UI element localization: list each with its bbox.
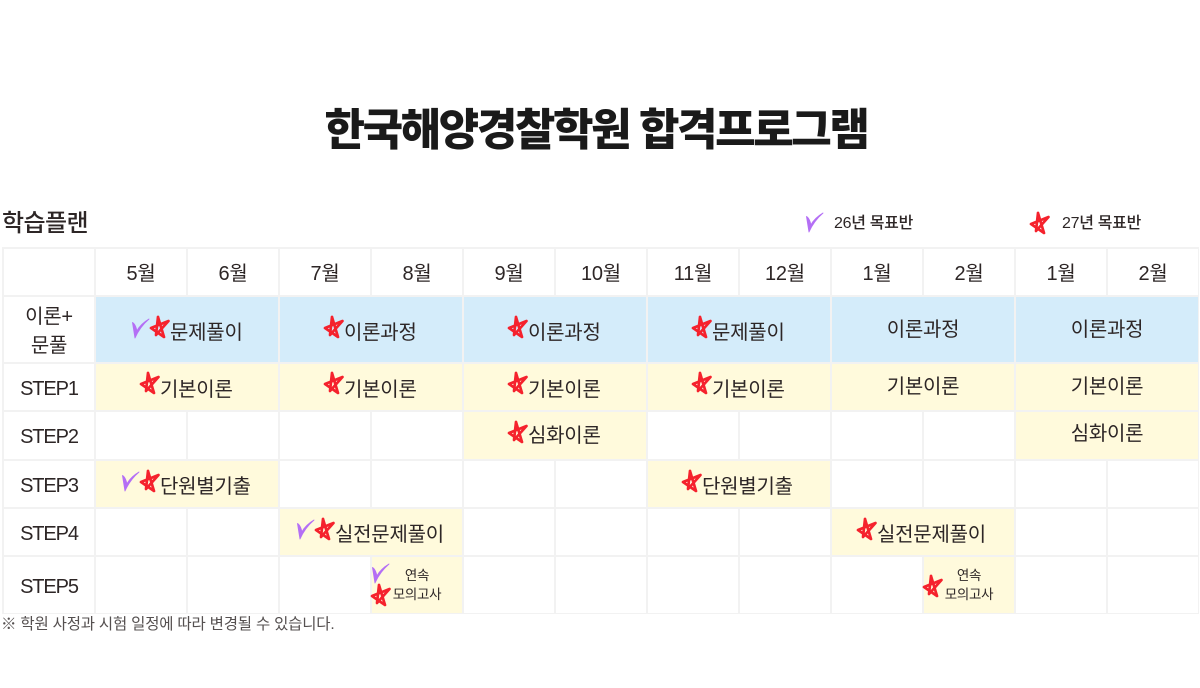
month header row [126, 263, 1168, 285]
row: theory + problems: 이론과정 [528, 322, 601, 344]
row: step 3 [122, 470, 793, 498]
row labels: 문풀 [31, 335, 67, 357]
row: step 4: 실전문제풀이 [335, 524, 444, 546]
row labels: STEP2 [20, 426, 78, 448]
row: step 1: 기본이론 [160, 379, 233, 401]
row: step 1: 기본이론 [528, 379, 601, 401]
row: step 1: 기본이론 [1071, 376, 1143, 398]
row labels: STEP1 [20, 378, 78, 400]
row: step 4: 실전문제풀이 [877, 524, 986, 546]
row: step 2 [508, 420, 1143, 447]
month header row: 1월 [1046, 263, 1076, 285]
row: step 4 [297, 518, 986, 546]
row labels: STEP5 [20, 576, 78, 598]
row: theory + problems: 이론과정 [344, 322, 417, 344]
month header row: 6월 [218, 263, 248, 285]
row: theory + problems: 이론과정 [887, 319, 959, 341]
row: step 3: 단원별기출 [160, 476, 251, 498]
legend: 26 target class: 26년 목표반 [834, 215, 913, 232]
month header row: 5월 [126, 263, 156, 285]
row: step 1: 기본이론 [712, 379, 785, 401]
title: 한국해양경찰학원 합격프로그램 [325, 106, 867, 155]
row: step 1 [140, 372, 1143, 401]
row: theory + problems: 이론과정 [1071, 319, 1143, 341]
row: step 1: 기본이론 [887, 376, 959, 398]
row: theory + problems: 문제풀이 [170, 322, 243, 344]
month header row: 7월 [310, 263, 340, 285]
row labels: STEP3 [20, 475, 78, 497]
row: step 1: 기본이론 [344, 379, 417, 401]
month header row: 2월 [1138, 263, 1168, 285]
legend: 26 target class [806, 212, 913, 232]
row: step 5 [370, 564, 994, 606]
row: step 5: 연속 [957, 568, 981, 583]
month header row: 9월 [494, 263, 524, 285]
row labels: 이론+ [25, 306, 73, 328]
month header row: 1월 [862, 263, 892, 285]
row: step 5: 모의고사 [945, 586, 993, 602]
legend: 27 target class [1030, 212, 1141, 234]
row labels: STEP4 [20, 523, 78, 545]
row: step 3: 단원별기출 [702, 476, 793, 498]
month header row: 12월 [765, 263, 805, 285]
row labels [20, 306, 78, 598]
month header row: 2월 [954, 263, 984, 285]
month header row: 8월 [402, 263, 432, 285]
month header row: 10월 [581, 263, 621, 285]
footnote: ※ 학원 사정과 시험 일정에 따라 변경될 수 있습니다. [1, 616, 334, 633]
month header row: 11월 [674, 263, 712, 285]
row: theory + problems: 문제풀이 [712, 322, 785, 344]
row: theory + problems [132, 316, 1143, 344]
row: step 2: 심화이론 [1071, 423, 1143, 445]
row: step 5: 모의고사 [393, 586, 441, 602]
legend: 27 target class: 27년 목표반 [1062, 215, 1141, 232]
row: step 2: 심화이론 [528, 425, 601, 447]
row: step 5: 연속 [405, 568, 429, 583]
heading: study plan: 학습플랜 [2, 210, 88, 237]
